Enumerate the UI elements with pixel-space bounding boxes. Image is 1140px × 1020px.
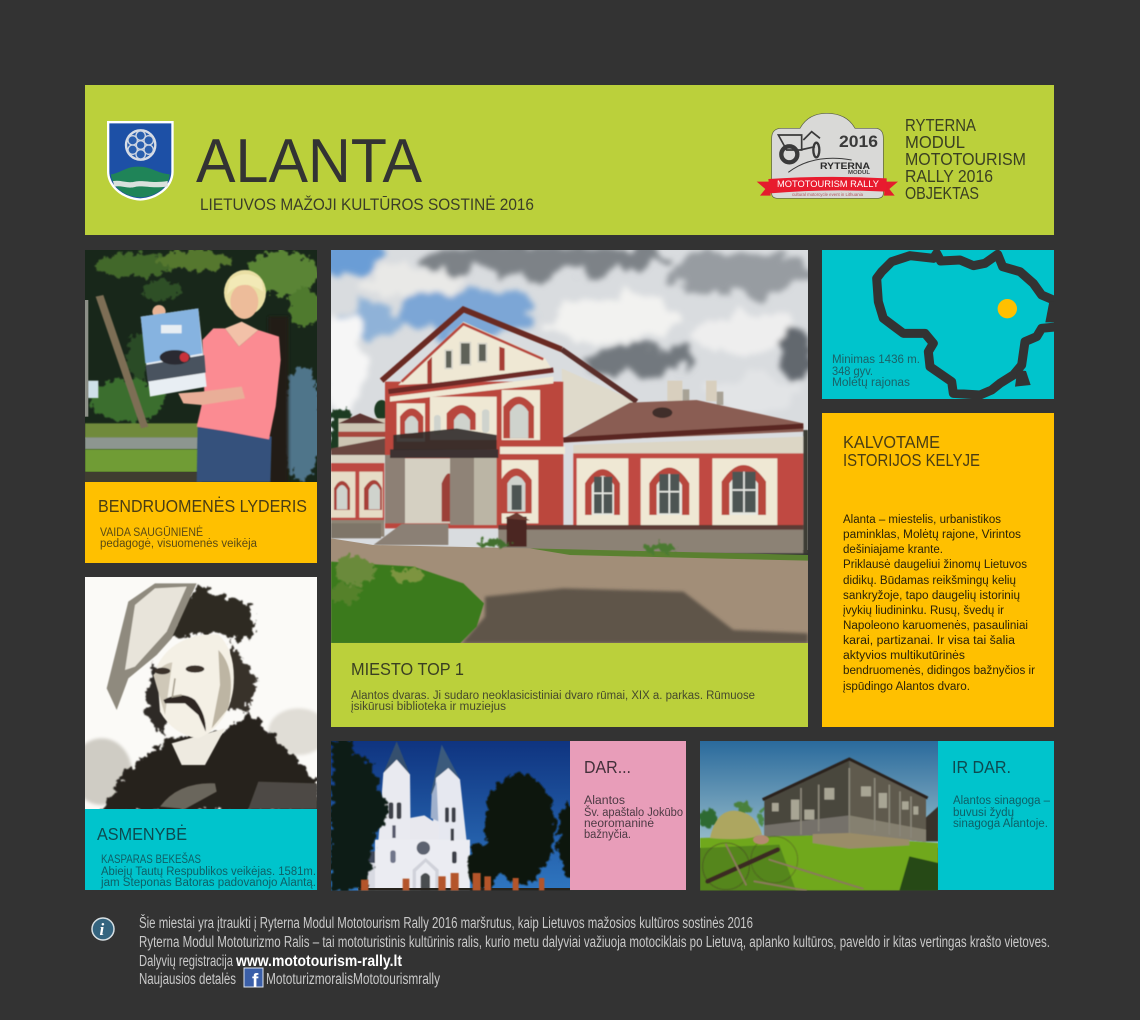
icon: info <box>92 918 114 940</box>
main caption heading: MIESTO TOP 1 <box>351 659 464 679</box>
church text: bažnyčia. <box>584 829 631 841</box>
rally object text <box>905 115 1026 203</box>
icon: rally plate logo: MOTOTOURISM RALLY <box>777 179 879 189</box>
synagogue text: Alantos sinagoga – <box>953 795 1051 807</box>
poster <box>141 308 207 397</box>
church heading: DAR... <box>584 757 631 777</box>
woman <box>152 270 281 482</box>
synagogue text: buvusi žydų <box>953 807 1014 819</box>
map facts: 348 gyv. <box>832 366 873 378</box>
icon: rally plate logo <box>757 113 898 198</box>
church text: neoromaninė <box>584 818 654 830</box>
right wing roof and wall <box>563 400 803 441</box>
history text: įvykių liudininku. Rusų, švedų ir <box>843 605 1004 617</box>
footer note: Naujausios detalės <box>139 971 236 988</box>
left wing <box>338 418 385 448</box>
photo: Alanta manor <box>313 238 815 643</box>
personality heading: ASMENYBĖ <box>97 824 187 844</box>
history text: didikų. Būdamas reikšmingų kelių <box>843 575 1016 587</box>
photo: wooden synagogue <box>700 741 938 891</box>
rally object text: MODUL <box>905 132 965 152</box>
panel: history <box>822 413 1054 727</box>
title: ALANTA <box>196 127 423 196</box>
icon: coat of arms <box>107 121 174 201</box>
leader heading: BENDRUOMENĖS LYDERIS <box>98 496 307 516</box>
location marker <box>998 299 1017 318</box>
leader text: pedagogė, visuomenės veikėja <box>100 538 258 550</box>
panel: community leader <box>85 250 322 563</box>
photo: church <box>331 741 578 891</box>
central block <box>385 382 563 528</box>
history heading: ISTORIJOS KELYJE <box>843 450 980 470</box>
panel: personality <box>72 577 328 890</box>
footer note: Dalyvių registracija <box>139 953 233 970</box>
history text: aktyvios multikutūrinės <box>843 650 965 662</box>
church text: Šv. apaštalo Jokūbo <box>584 806 683 819</box>
history text <box>843 514 1035 693</box>
synagogue text: sinagoga Alantoje. <box>953 818 1048 830</box>
history text: sankryžoje, tapo daugelių istorinių <box>843 590 1020 602</box>
rally object text: RALLY 2016 <box>905 166 993 186</box>
icon: rally plate logo: MODUL <box>848 170 870 176</box>
history text: Alanta – miestelis, urbanistikos <box>843 514 1001 526</box>
courtyard <box>331 538 808 643</box>
main caption panel <box>331 643 808 727</box>
personality text <box>100 853 316 889</box>
rally object text: RYTERNA <box>905 115 976 135</box>
map of Lithuania <box>877 253 1058 395</box>
panel: church <box>331 741 686 891</box>
synagogue caption panel <box>938 741 1054 890</box>
history text: paminklas, Molėtų rajone, Virintos <box>843 529 1021 541</box>
map facts: Minimas 1436 m. <box>832 354 920 366</box>
leader caption panel <box>85 482 317 563</box>
history text: įspūdingo Alantos dvaro. <box>843 681 970 693</box>
church caption panel <box>570 741 686 890</box>
history heading: KALVOTAME <box>843 432 940 452</box>
rally object text: OBJEKTAS <box>905 183 979 203</box>
footer note: www.mototourism-rally.lt <box>235 953 402 970</box>
history text: dešiniajame krante. <box>843 544 943 556</box>
icon: rally plate logo: 2016 <box>839 132 878 151</box>
history text: bendruomenės, didingos bažnyčios ir <box>843 665 1035 677</box>
side wall <box>562 368 637 437</box>
rally object text: MOTOTOURISM <box>905 149 1026 169</box>
main caption text: įsikūrusi biblioteka ir muziejus <box>351 701 506 713</box>
panel: header <box>85 85 1054 235</box>
leader text <box>100 526 258 550</box>
church text: Alantos <box>584 795 625 807</box>
subtitle: LIETUVOS MAŽOJI KULTŪROS SOSTINĖ 2016 <box>200 195 534 214</box>
footer note <box>139 915 1050 988</box>
synagogue heading: IR DAR. <box>952 757 1011 777</box>
main caption text <box>351 690 755 713</box>
footer note: Šie miestai yra įtraukti į Ryterna Modul Mototourism Rally 2016 maršrutus, kaip Lietuvos mažosios kultūros sostinės 2016 <box>139 915 753 932</box>
photo: woman with poster <box>85 250 322 483</box>
porch <box>404 458 452 523</box>
church text <box>584 795 683 841</box>
map facts <box>832 354 920 389</box>
personality text: KASPARAS BEKEŠAS <box>101 853 201 866</box>
footer <box>92 915 1050 992</box>
panel: synagogue <box>700 741 1054 891</box>
footer note: MototurizmoralisMototourismrally <box>266 971 440 988</box>
personality text: Abiejų Tautų Respublikos veikėjas. 1581m. <box>101 866 316 878</box>
icon: info: i <box>100 920 104 939</box>
synagogue text <box>953 795 1051 830</box>
history text: Priklausė daugeliui žinomų Lietuvos <box>843 559 1027 571</box>
panel: location map <box>822 250 1058 399</box>
map facts: Molėtų rajonas <box>832 377 910 389</box>
portrait engraving <box>85 577 317 809</box>
main caption text: Alantos dvaras. Ji sudaro neoklasicistiniai dvaro rūmai, XIX a. parkas. Rūmuose <box>351 690 755 702</box>
panel: town top 1 <box>313 238 815 727</box>
icon: facebook <box>244 968 263 992</box>
history text: Napoleono karuomenės, pasauliniai <box>843 620 1028 632</box>
personality caption panel <box>85 809 317 890</box>
icon: facebook: f <box>252 971 259 992</box>
personality text: jam Steponas Batoras padovanojo Alantą. <box>100 877 316 889</box>
icon: rally plate logo: RYTERNA <box>820 161 870 172</box>
history text: karai, partizanai. Ir visa tai šalia <box>843 635 1016 647</box>
chimneys <box>683 389 689 403</box>
leader text: VAIDA SAUGŪNIENĖ <box>100 526 203 539</box>
icon: rally plate logo: cultural motorcycle event in Lithuania <box>792 192 863 197</box>
history heading <box>843 432 980 470</box>
